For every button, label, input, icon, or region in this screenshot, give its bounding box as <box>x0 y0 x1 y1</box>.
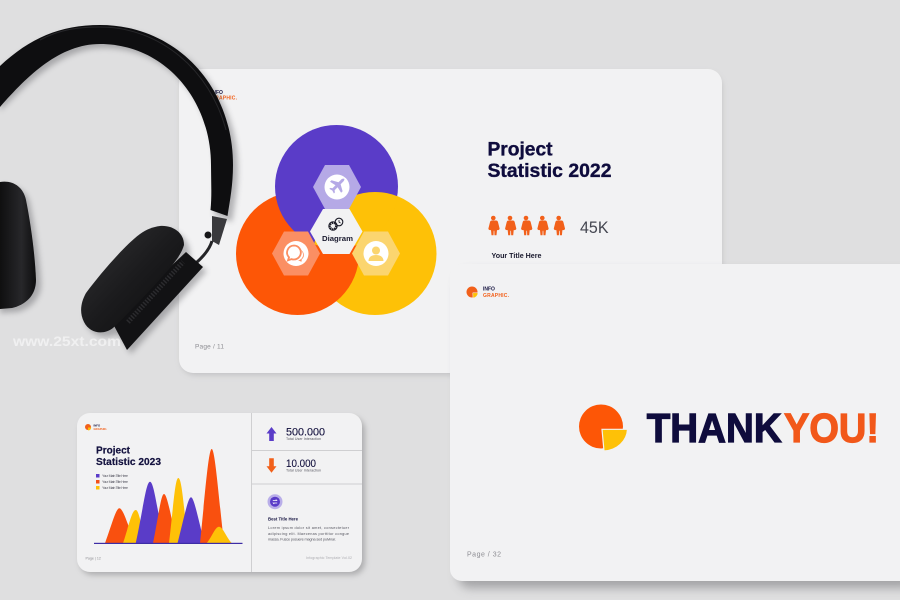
stat: 45K: 45K <box>580 218 609 237</box>
hinge and stem <box>212 216 227 245</box>
venn diagram <box>236 125 436 315</box>
text: best title here: Best Title Here <box>268 516 298 522</box>
stat: up arrow 500.000 <box>266 426 325 441</box>
panel: venn diagram slide <box>179 69 722 375</box>
hexagon: chat <box>272 232 320 276</box>
legend: Your Main Title Here <box>102 480 128 484</box>
label: your title here: Your Title Here <box>492 251 542 260</box>
stat: up arrow 500.000: 500.000 <box>286 426 325 438</box>
stat: down arrow 10.000: Total User Interaction <box>286 468 321 472</box>
stat: down arrow 10.000: 10.000 <box>286 458 316 470</box>
small logo: INFO <box>94 424 101 428</box>
heading: thank you <box>647 405 879 451</box>
page number: Page / 32 <box>467 552 501 558</box>
heading: project statistic 2023 <box>96 446 161 468</box>
logo: INFO <box>483 286 495 292</box>
left ear cup <box>0 182 36 309</box>
hexagon: center diagram <box>310 209 362 254</box>
heading: project statistic 2023: Project <box>96 446 131 456</box>
icon: purple badge <box>268 494 282 509</box>
legend: Your Main Title Here <box>102 474 128 478</box>
slide logo text: GRAPHIC. <box>211 96 238 102</box>
mountain chart <box>94 449 242 544</box>
headphones <box>0 25 238 354</box>
small logo: GRAPHIC. <box>94 427 107 431</box>
paragraph: adipiscing elit. Maecenas porttitor congue <box>268 532 349 536</box>
small logo <box>85 424 107 431</box>
icon row: people <box>488 216 565 235</box>
right ear cushion <box>81 226 184 332</box>
heading: thank you: THANK <box>647 405 782 451</box>
panel: thank you slide <box>450 264 900 588</box>
watermark: www.25xt.com <box>12 333 121 349</box>
heading: project statistic 2022: Project <box>488 140 553 160</box>
heading: thank you: YOU! <box>784 405 879 451</box>
right ear cup back <box>112 252 203 350</box>
hexagon: plane <box>313 165 361 209</box>
heading: project statistic 2022: Statistic 2022 <box>488 161 612 182</box>
footer text: Infographic Template Vol.02 <box>306 556 352 560</box>
heading: project statistic 2023: Statistic 2023 <box>96 457 161 468</box>
paragraph <box>268 526 350 542</box>
slide logo text <box>211 90 238 102</box>
logo <box>466 286 510 299</box>
icon: gears <box>329 218 343 230</box>
heading: project statistic 2022 <box>488 140 612 182</box>
label: diagram: Diagram <box>322 236 353 243</box>
legend: Your Main Title Here <box>102 486 128 490</box>
stat: up arrow 500.000: Total User Interaction <box>286 437 321 441</box>
headband <box>0 25 233 216</box>
page number: Page / 11 <box>195 344 224 350</box>
logo: GRAPHIC. <box>483 293 510 299</box>
headphone shadows <box>0 29 238 354</box>
paragraph: Lorem ipsum dolor sit amet, consectetuer <box>268 526 350 530</box>
stat: down arrow 10.000 <box>266 458 321 473</box>
slide logo text: INFO <box>211 90 223 96</box>
panel: statistic 2023 slide <box>77 413 365 575</box>
page number: Page | 12 <box>86 556 101 560</box>
legend <box>96 474 128 490</box>
hexagon: user <box>352 232 400 276</box>
paragraph: massa. Fusce posuere magna sed pulvinar. <box>268 538 336 542</box>
icon: big pie logo <box>579 404 628 451</box>
